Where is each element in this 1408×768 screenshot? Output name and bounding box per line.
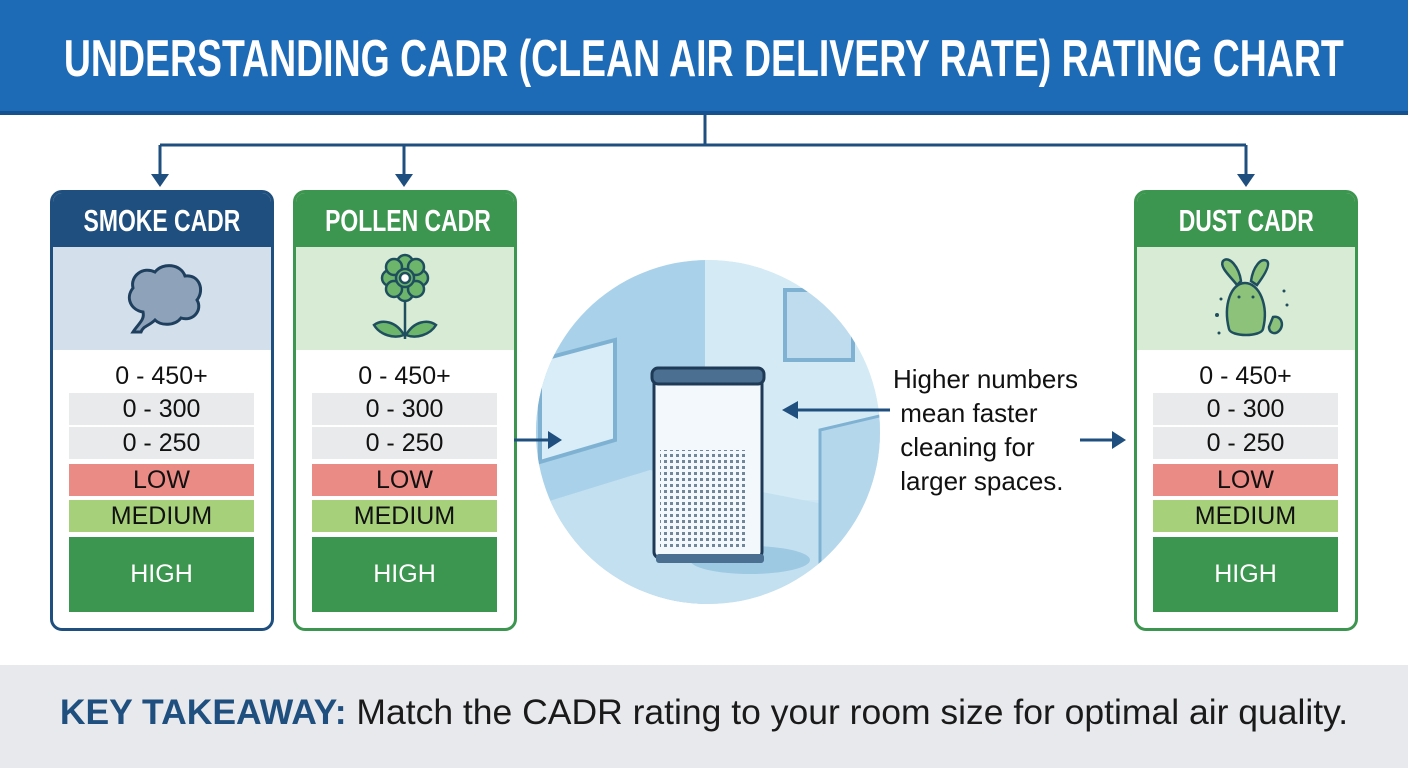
panel: smoke bbox=[50, 190, 274, 631]
panel: dust: 0 - 300 bbox=[1207, 395, 1284, 423]
panel: dust: LOW bbox=[1217, 466, 1274, 494]
heading: pollen: POLLEN CADR bbox=[325, 203, 491, 238]
icon: flower bbox=[296, 247, 514, 350]
arrow: from text bbox=[782, 401, 890, 419]
heading: dust bbox=[1137, 193, 1355, 247]
panel: smoke: 0 - 450+ bbox=[115, 362, 208, 390]
panel: pollen: 0 - 450+ bbox=[358, 362, 451, 390]
panel: pollen: HIGH bbox=[373, 560, 436, 588]
panel: smoke: LOW bbox=[133, 466, 190, 494]
panel: pollen: 0 - 250 bbox=[366, 429, 443, 457]
arrow: into purifier bbox=[514, 431, 562, 449]
heading: dust: DUST CADR bbox=[1178, 203, 1314, 238]
key takeaway: KEY TAKEAWAY: Match the CADR rating to your room size for optimal air quality. bbox=[60, 692, 1348, 732]
arrow: to dust bbox=[1080, 431, 1126, 449]
purifier bbox=[652, 368, 764, 563]
callout text bbox=[893, 364, 1078, 496]
panel: dust: MEDIUM bbox=[1195, 502, 1296, 530]
panel: smoke: 0 - 300 bbox=[123, 395, 200, 423]
illustration: air purifier in room bbox=[536, 260, 880, 604]
panel: dust: 0 - 450+ bbox=[1199, 362, 1292, 390]
heading: pollen bbox=[296, 193, 514, 247]
icon: bunny bbox=[1137, 247, 1355, 350]
panel: pollen: MEDIUM bbox=[354, 502, 455, 530]
panel: pollen bbox=[293, 190, 517, 631]
panel: dust: HIGH bbox=[1214, 560, 1277, 588]
panel: pollen: 0 - 300 bbox=[366, 395, 443, 423]
heading: smoke bbox=[53, 193, 271, 247]
icon: smoke cloud bbox=[53, 247, 271, 350]
panel: pollen: LOW bbox=[376, 466, 433, 494]
title banner bbox=[0, 0, 1408, 115]
callout text: larger spaces. bbox=[900, 466, 1064, 496]
panel: dust bbox=[1134, 190, 1358, 631]
callout text: mean faster bbox=[900, 398, 1038, 428]
callout text: Higher numbers bbox=[893, 364, 1078, 394]
panel: smoke: HIGH bbox=[130, 560, 193, 588]
panel: smoke: MEDIUM bbox=[111, 502, 212, 530]
panel: dust: 0 - 250 bbox=[1207, 429, 1284, 457]
connector arrows bbox=[151, 115, 1255, 187]
callout text: cleaning for bbox=[900, 432, 1035, 462]
heading: smoke: SMOKE CADR bbox=[84, 203, 240, 238]
title: UNDERSTANDING CADR (CLEAN AIR DELIVERY RATE) RATING CHART bbox=[64, 30, 1344, 88]
footer band bbox=[0, 665, 1408, 768]
panel: smoke: 0 - 250 bbox=[123, 429, 200, 457]
